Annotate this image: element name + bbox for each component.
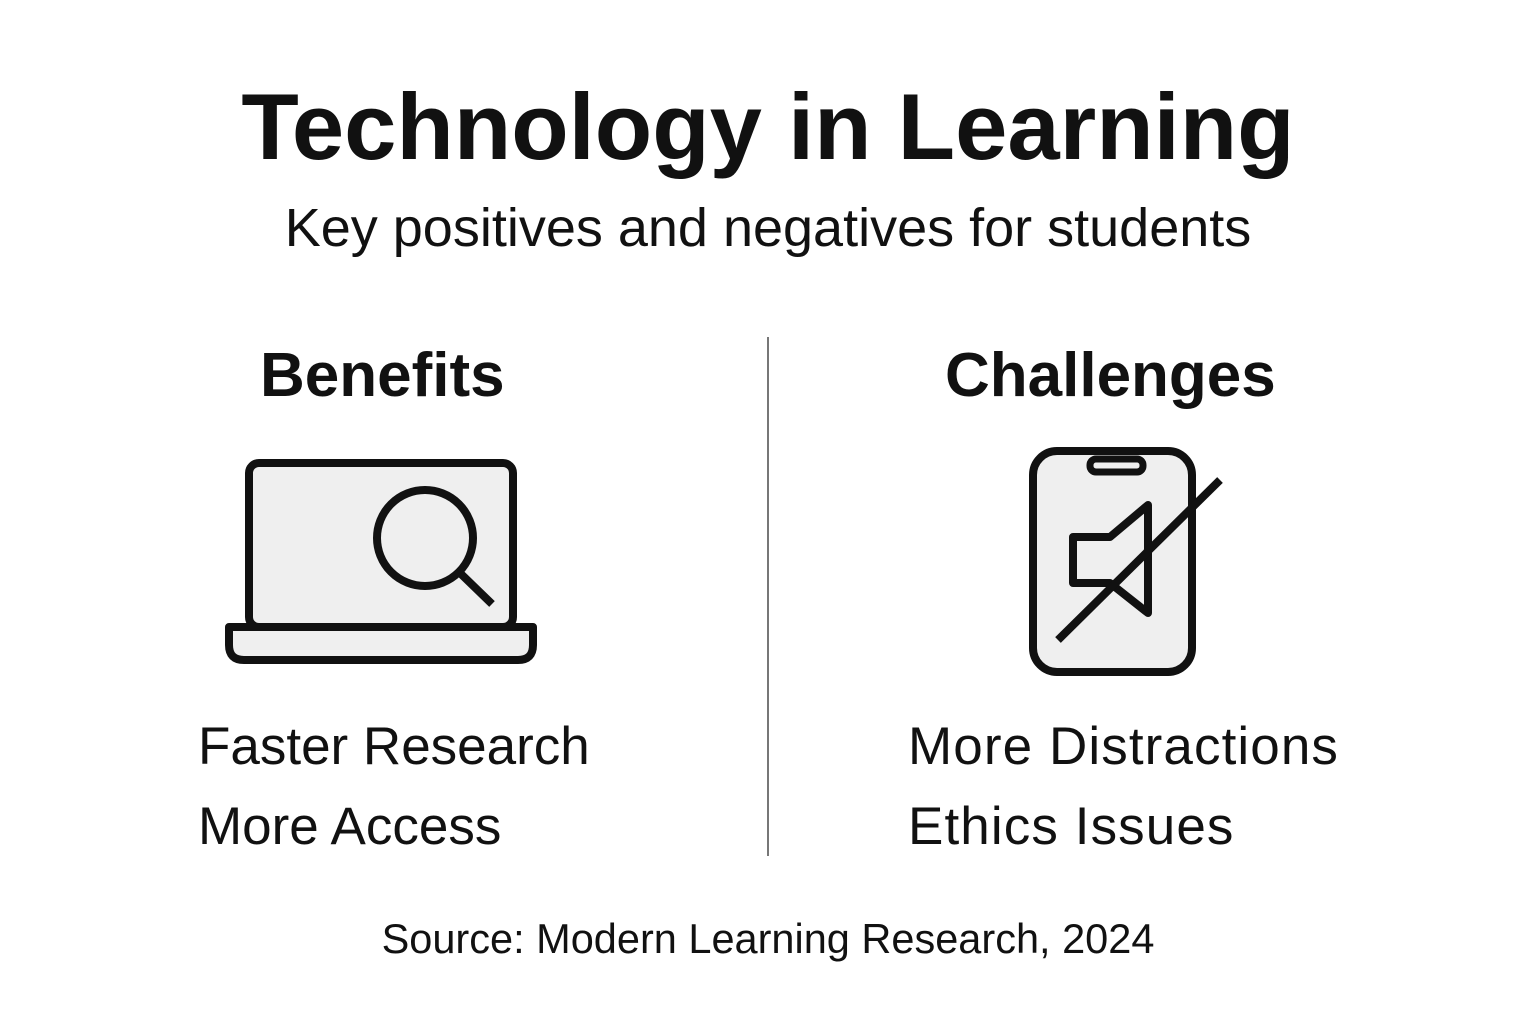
heading: challenges: Challenges xyxy=(945,341,1276,410)
text: challenges list: Ethics Issues xyxy=(908,797,1235,856)
icon: phone with muted speaker xyxy=(1029,447,1223,676)
icon: laptop with magnifier xyxy=(225,459,537,664)
panel: challenges xyxy=(908,341,1339,856)
heading: benefits: Benefits xyxy=(260,341,505,410)
panel: benefits xyxy=(198,341,590,856)
source footnote: Source: Modern Learning Research, 2024 xyxy=(382,915,1154,962)
text: benefits list xyxy=(198,717,590,856)
text: challenges list xyxy=(908,717,1339,856)
text: benefits list: Faster Research xyxy=(198,717,590,776)
divider xyxy=(767,337,769,856)
title: Technology in Learning xyxy=(241,74,1295,179)
text: benefits list: More Access xyxy=(198,797,501,856)
subtitle: Key positives and negatives for students xyxy=(285,198,1251,258)
text: challenges list: More Distractions xyxy=(908,717,1339,776)
